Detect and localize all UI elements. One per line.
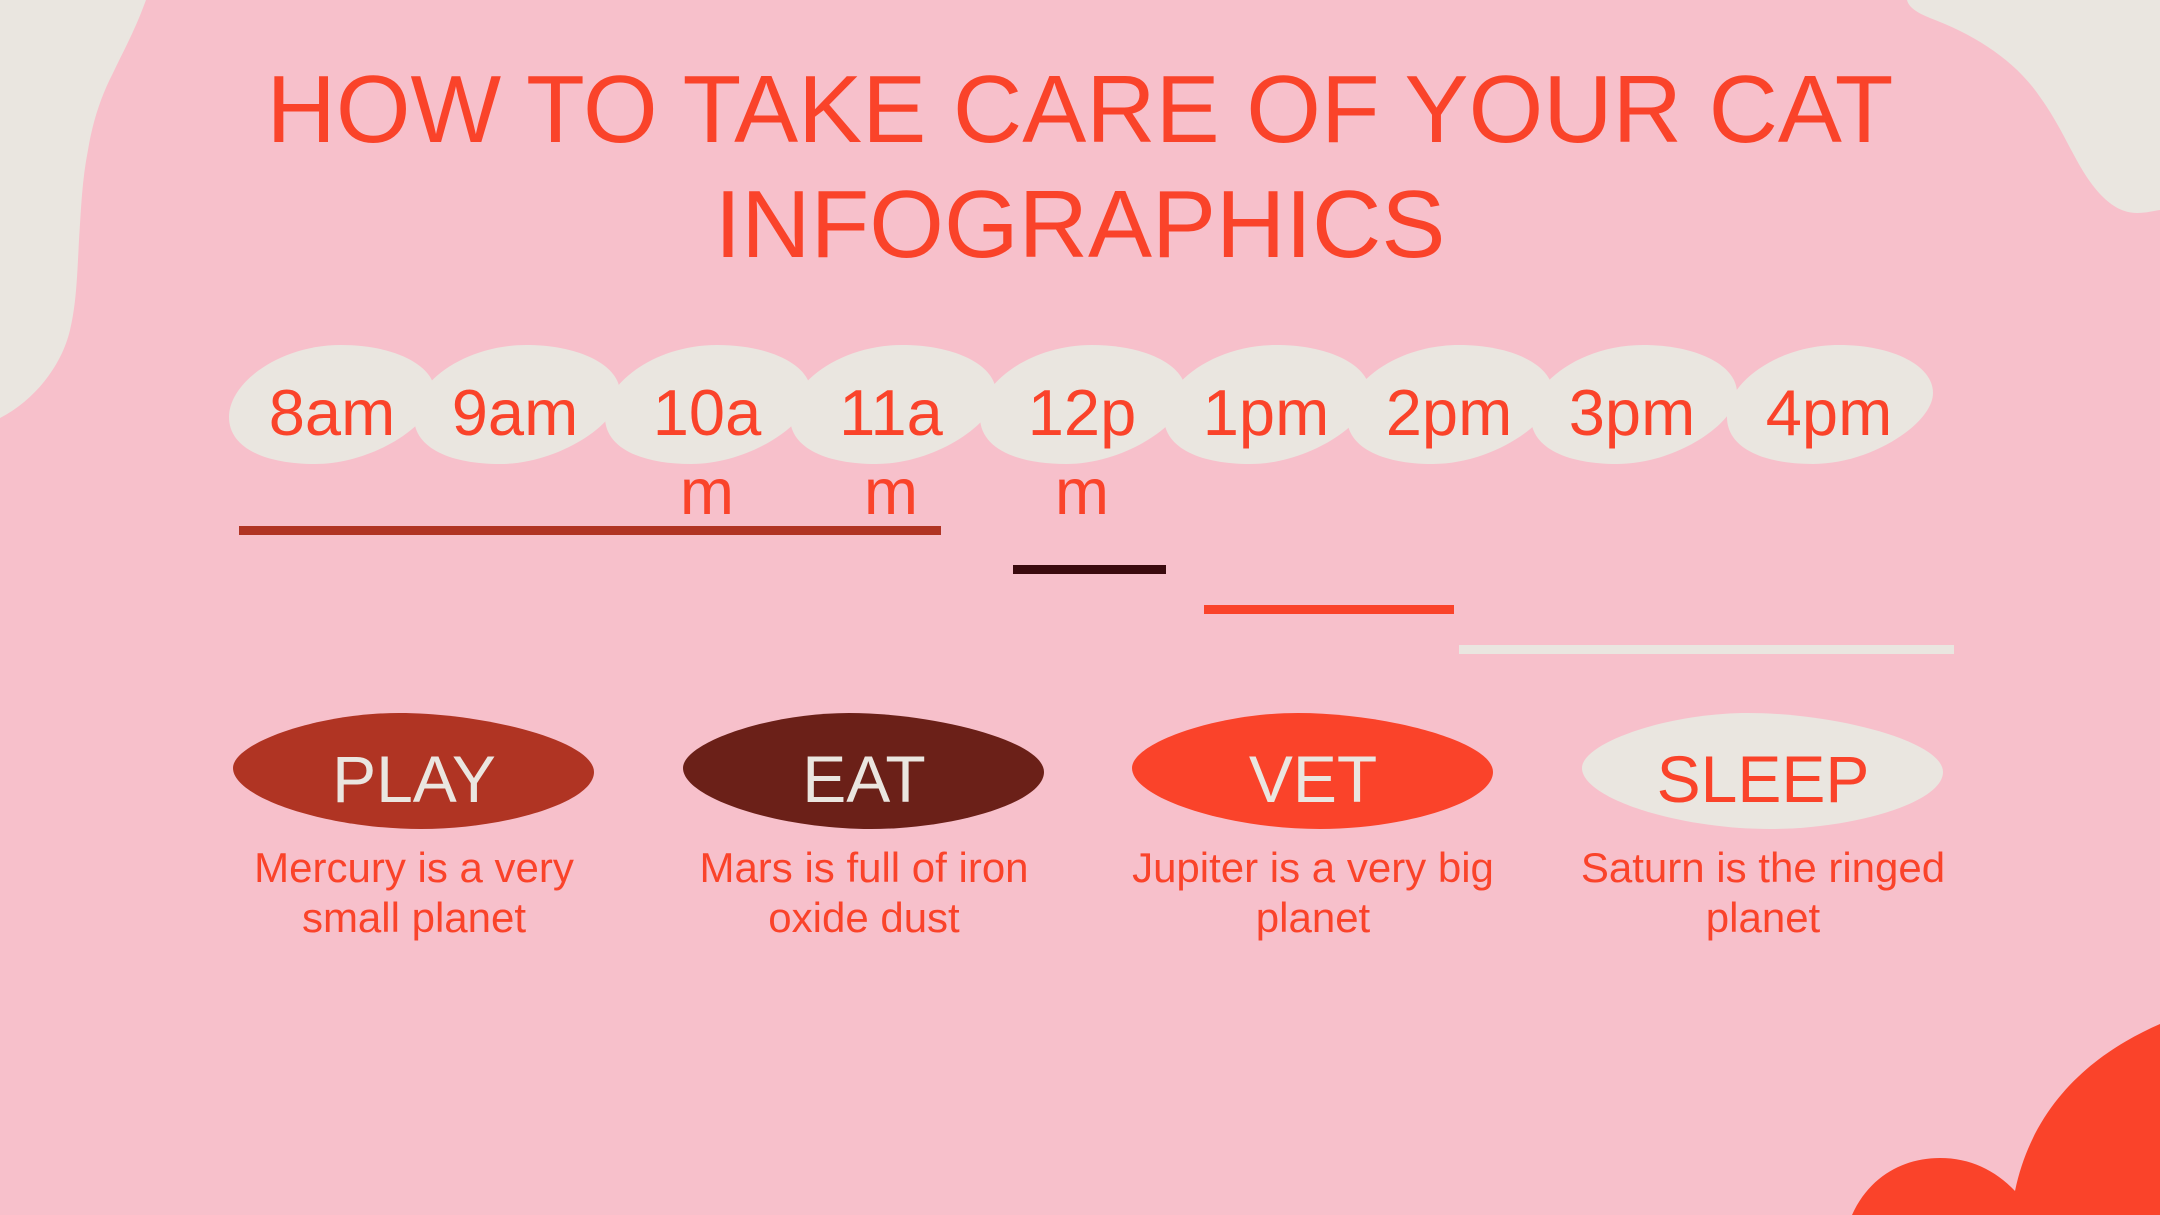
play description bbox=[254, 844, 574, 941]
eat description: oxide dust bbox=[768, 894, 960, 941]
vet description: planet bbox=[1256, 894, 1371, 941]
play description: small planet bbox=[302, 894, 526, 941]
hour: 8am bbox=[229, 345, 435, 464]
hour: 12pm: 12p bbox=[1028, 376, 1136, 449]
play description: Mercury is a very bbox=[254, 844, 574, 891]
decorative blob: top right bbox=[1907, 0, 2160, 213]
hour: 10am bbox=[605, 345, 811, 528]
sleep description: Saturn is the ringed bbox=[1581, 844, 1945, 891]
schedule bar: vet bbox=[1204, 605, 1454, 614]
sleep description: planet bbox=[1706, 894, 1821, 941]
title bbox=[267, 56, 1893, 278]
vet pill: VET bbox=[1249, 742, 1377, 816]
vet pill bbox=[1132, 713, 1493, 829]
activity: vet bbox=[1132, 713, 1494, 941]
hour: 9am: 9am bbox=[452, 376, 578, 449]
hour: 12pm bbox=[980, 345, 1186, 528]
hour: 9am bbox=[414, 345, 620, 464]
hour: 11am: m bbox=[864, 455, 918, 528]
play pill bbox=[233, 713, 594, 829]
sleep description bbox=[1581, 844, 1945, 941]
hour: 3pm bbox=[1531, 345, 1737, 464]
title: HOW TO TAKE CARE OF YOUR CAT bbox=[267, 56, 1893, 163]
eat pill bbox=[683, 713, 1044, 829]
hour: 11am bbox=[790, 345, 996, 528]
sleep pill: SLEEP bbox=[1657, 742, 1869, 816]
hour: 10am: m bbox=[680, 455, 734, 528]
hour: 2pm bbox=[1347, 345, 1553, 464]
activity: eat bbox=[683, 713, 1044, 941]
hour: 4pm bbox=[1727, 345, 1933, 464]
hour: 1pm bbox=[1164, 345, 1370, 464]
play pill: PLAY bbox=[332, 742, 496, 816]
hour: 1pm: 1pm bbox=[1203, 376, 1329, 449]
hour: 11am: 11a bbox=[839, 376, 944, 449]
sleep pill bbox=[1582, 713, 1943, 829]
hour: 2pm: 2pm bbox=[1386, 376, 1512, 449]
schedule bar: play bbox=[239, 526, 941, 535]
schedule bar: sleep bbox=[1459, 645, 1954, 654]
decorative blob: top left bbox=[0, 0, 146, 418]
timeline hour bubbles bbox=[229, 345, 1933, 528]
hour: 10am: 10a bbox=[653, 376, 762, 449]
eat pill: EAT bbox=[802, 742, 926, 816]
schedule bar: eat bbox=[1013, 565, 1166, 574]
eat description: Mars is full of iron bbox=[699, 844, 1029, 891]
vet description: Jupiter is a very big bbox=[1132, 844, 1494, 891]
hour: 8am: 8am bbox=[269, 376, 395, 449]
activity: play bbox=[233, 713, 594, 941]
eat description bbox=[699, 844, 1029, 941]
vet description bbox=[1132, 844, 1494, 941]
activity: sleep bbox=[1581, 713, 1945, 941]
title: INFOGRAPHICS bbox=[715, 171, 1445, 278]
hour: 4pm: 4pm bbox=[1766, 376, 1892, 449]
hour: 3pm: 3pm bbox=[1569, 376, 1695, 449]
decorative blob: bottom right bbox=[1852, 1024, 2160, 1215]
hour: 12pm: m bbox=[1055, 455, 1109, 528]
